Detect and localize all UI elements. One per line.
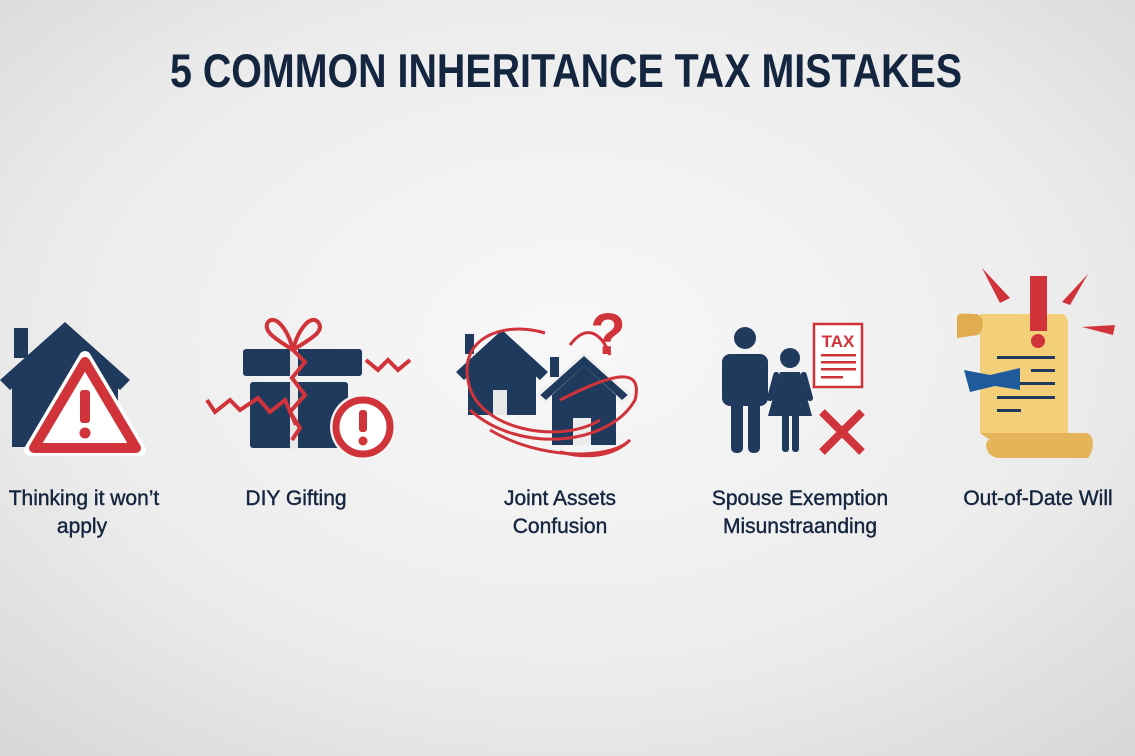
text: apply — [57, 515, 108, 538]
text: Misunstraanding — [723, 515, 877, 538]
label: spouse exemption: Spouse Exemption — [712, 487, 888, 510]
label: thinking it won't apply: Thinking it won’t — [9, 487, 159, 510]
icon: spouse with tax: TAX — [822, 332, 855, 351]
icon: house with warning — [0, 322, 140, 450]
title: 5 COMMON INHERITANCE TAX MISTAKES — [170, 44, 962, 97]
icon: spouse with tax — [722, 324, 862, 453]
label: DIY gifting: DIY Gifting — [245, 487, 347, 510]
label: out-of-date will: Out-of-Date Will — [963, 487, 1113, 510]
icon: broken gift — [207, 320, 410, 460]
label: joint assets confusion: Joint Assets — [504, 487, 616, 510]
icon: joint assets houses — [456, 302, 636, 456]
icon: out-of-date will scroll — [957, 268, 1115, 458]
text: Confusion — [513, 515, 607, 538]
icon: joint assets houses: ? — [590, 302, 626, 367]
